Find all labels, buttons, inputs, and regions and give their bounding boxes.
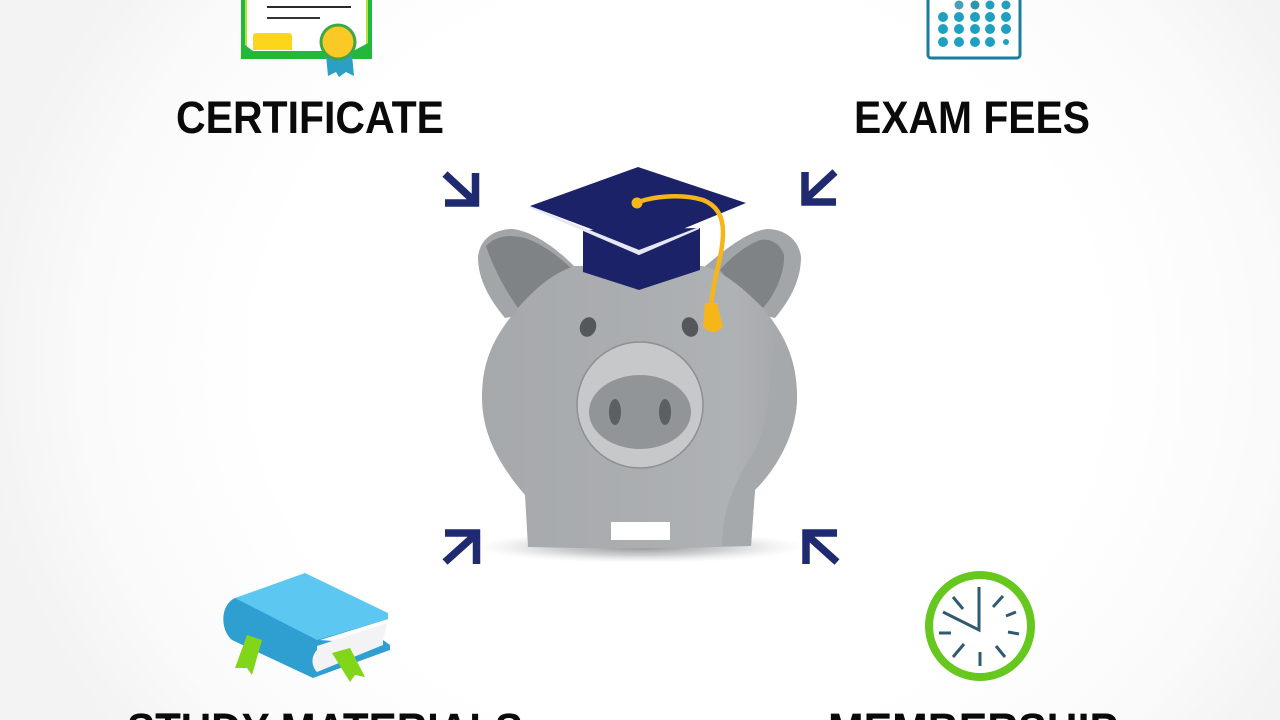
- ground shadow: [475, 531, 805, 563]
- membership group: [828, 575, 1118, 720]
- arrow: top right: [805, 172, 836, 202]
- icon: book: [223, 573, 390, 682]
- exam fees group: [854, 0, 1090, 143]
- left ear: [478, 229, 574, 318]
- pig body: [482, 266, 797, 548]
- arrow: top left: [445, 173, 476, 203]
- snout: [577, 342, 703, 468]
- icon: calendar: [928, 0, 1020, 58]
- heading: exam fees: EXAM FEES: [854, 92, 1090, 143]
- arrow: bottom left: [445, 533, 476, 564]
- body side shading: [722, 340, 797, 546]
- piggy bank: [475, 167, 805, 563]
- certificate group: [176, 0, 444, 143]
- eyes: [577, 315, 701, 339]
- arrow: bottom right: [806, 533, 837, 564]
- graduation cap: [530, 167, 746, 332]
- icon: certificate: [241, 0, 372, 77]
- study materials group: [127, 573, 523, 720]
- heading: certificate: CERTIFICATE: [176, 92, 444, 143]
- icon: clock: [929, 575, 1031, 677]
- tassel: [632, 196, 723, 332]
- right ear: [703, 229, 801, 318]
- coin slot: [611, 522, 670, 540]
